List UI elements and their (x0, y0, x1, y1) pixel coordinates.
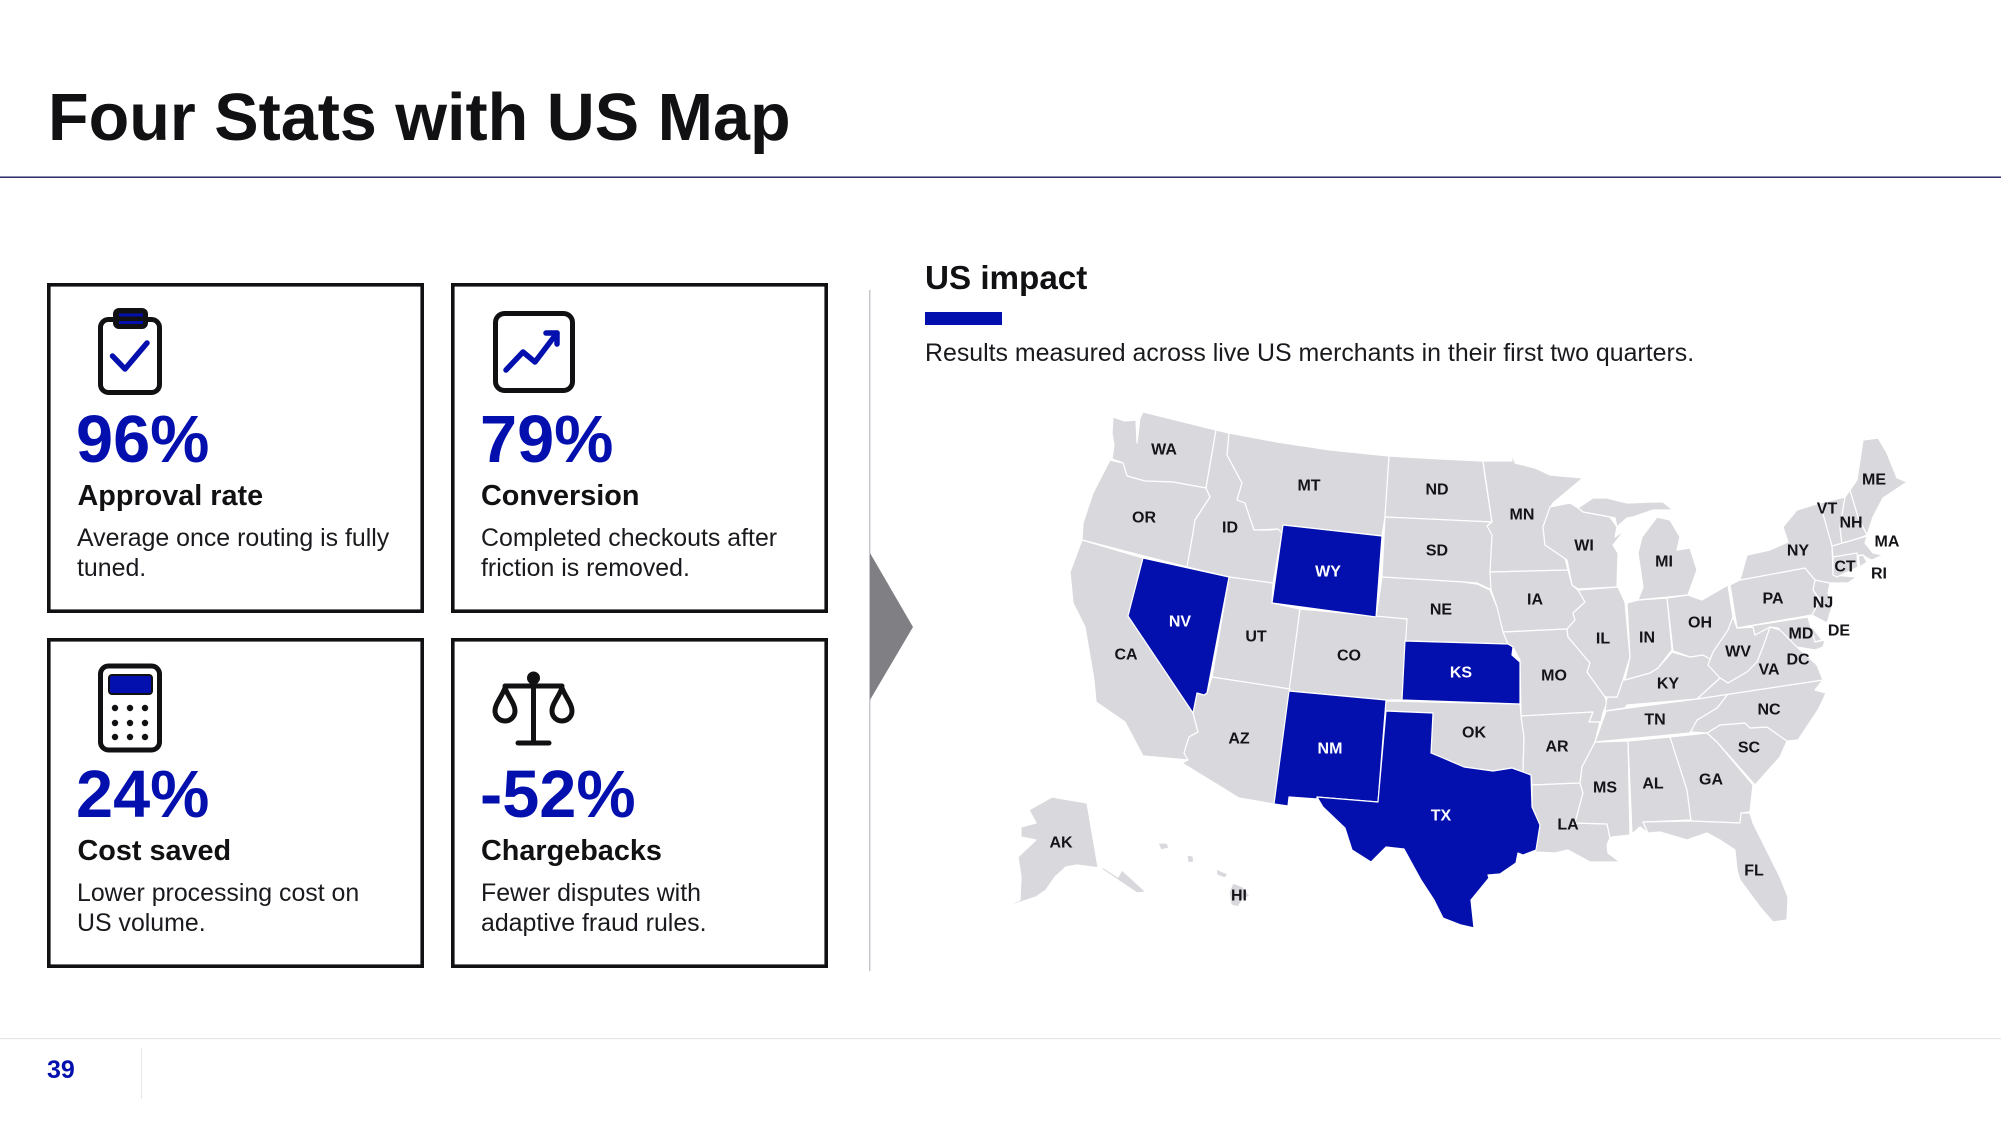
map: state abbreviations: NV (1169, 614, 1191, 630)
map: state abbreviations: WV (1725, 644, 1751, 660)
state: AR (1521, 712, 1600, 785)
state: DE (1808, 617, 1822, 642)
map: state abbreviations: NE (1430, 602, 1452, 618)
state: PA (1730, 568, 1820, 628)
state: TX (highlighted) (1317, 711, 1540, 928)
map: state abbreviations: MD (1789, 626, 1813, 642)
label: cost saved: Cost saved (78, 835, 231, 867)
state: NE (1376, 577, 1508, 644)
icon: scales (495, 672, 572, 743)
map: state abbreviations: HI (1231, 888, 1247, 904)
icon: clipboard check (100, 308, 160, 392)
map: state abbreviations: WI (1574, 538, 1594, 554)
map: state abbreviations: ID (1222, 520, 1238, 536)
map: state abbreviations: AZ (1228, 730, 1250, 748)
accent bar (925, 312, 1002, 325)
map: state abbreviations: NJ (1813, 594, 1833, 612)
icon: trend chart (496, 314, 572, 390)
map: state abbreviations: AK (1049, 834, 1073, 852)
state: LA (1532, 783, 1620, 862)
state: ID (1187, 430, 1282, 583)
state: IN (1625, 598, 1672, 680)
map: state abbreviations: MA (1875, 534, 1900, 550)
state: WY (highlighted) (1272, 525, 1382, 617)
state: RI (1858, 555, 1867, 567)
label: chargebacks: Chargebacks (481, 835, 662, 867)
description: approval rate: Average once routing is fully (77, 524, 390, 552)
state: WI (1543, 503, 1625, 589)
state: MD (1737, 617, 1825, 650)
stat: 96%: 96% (76, 403, 209, 477)
heading: US impact: US impact (925, 260, 1087, 297)
state: CT (1833, 553, 1858, 577)
map: state abbreviations: NY (1787, 542, 1809, 560)
state: KY (1605, 652, 1720, 711)
description: conversion: Completed checkouts after (481, 524, 777, 552)
state: VA (1697, 627, 1823, 699)
panel: approval rate card (49, 285, 422, 611)
description: cost saved: Lower processing cost on (77, 879, 359, 907)
state: SD (1382, 517, 1492, 590)
map: state abbreviations: IN (1639, 630, 1655, 646)
icon: calculator (100, 666, 160, 750)
map: state abbreviations: WA (1151, 442, 1177, 458)
arrow (870, 553, 913, 700)
state: KS (highlighted) (1402, 641, 1520, 704)
map: state abbreviations: CO (1337, 648, 1361, 664)
map: state abbreviations: MN (1510, 506, 1534, 524)
label: conversion: Conversion (481, 480, 639, 512)
state: NV (highlighted) (1128, 558, 1229, 713)
state: MT (1227, 433, 1389, 536)
state: WA (1112, 412, 1216, 488)
map: state abbreviations: DC (1786, 652, 1810, 668)
map: state abbreviations (1049, 442, 1900, 904)
state: AK (1004, 797, 1146, 908)
map: state abbreviations: LA (1557, 816, 1579, 834)
map: state abbreviations: WY (1315, 564, 1341, 580)
title: Four Stats with US Map (48, 81, 791, 155)
state: NH (1840, 490, 1867, 545)
panel: conversion card (453, 285, 826, 611)
description: conversion: friction is removed. (481, 554, 690, 582)
map: state abbreviations: DE (1828, 622, 1850, 640)
state: OK (1385, 701, 1524, 772)
state: AL (1628, 737, 1691, 834)
map: state abbreviations: ND (1425, 482, 1449, 498)
state: NJ (1812, 580, 1832, 623)
page number: 39 (47, 1056, 75, 1084)
map: state abbreviations: SD (1426, 542, 1448, 560)
map: state abbreviations: VA (1758, 662, 1780, 678)
panel: cost saved card (49, 640, 422, 966)
state: GA (1670, 733, 1753, 823)
label: approval rate: Approval rate (78, 480, 263, 512)
text: map description: Results measured across live US merchants in their first two quarters. (925, 339, 1694, 367)
stat: -52%: -52% (480, 758, 636, 832)
state: WV (1708, 617, 1778, 683)
description: cost saved: US volume. (77, 909, 206, 937)
map: state abbreviations: IL (1596, 630, 1610, 648)
footer divider (141, 1048, 142, 1099)
map: state abbreviations: PA (1762, 590, 1784, 608)
map: state abbreviations: TN (1644, 712, 1666, 728)
state: MI (1578, 498, 1697, 600)
stat: 79%: 79% (480, 403, 613, 477)
map: state abbreviations: MO (1541, 668, 1567, 684)
map: state abbreviations: OH (1688, 614, 1712, 632)
state: IL (1567, 587, 1630, 697)
state: SC (1707, 723, 1787, 785)
state: AZ (1182, 677, 1290, 804)
state: CO (1289, 609, 1407, 700)
map: state abbreviations: SC (1738, 740, 1761, 756)
map: state abbreviations: CA (1114, 646, 1138, 664)
state: ND (1385, 456, 1492, 522)
state: CA (1070, 540, 1198, 760)
map: state abbreviations: ME (1862, 472, 1886, 488)
map: state abbreviations: MS (1593, 780, 1617, 796)
map: state abbreviations: KS (1450, 664, 1472, 682)
state: ME (1850, 438, 1907, 535)
state: FL (1643, 813, 1788, 922)
map: state abbreviations: TX (1431, 808, 1452, 824)
state: MN (1483, 453, 1583, 572)
state: MS (1575, 741, 1630, 838)
state: TN (1595, 694, 1728, 742)
state: VT (1820, 497, 1845, 546)
description: chargebacks: Fewer disputes with (481, 879, 701, 907)
stat: 24%: 24% (76, 758, 209, 832)
map: state abbreviations: CT (1834, 558, 1856, 576)
state: MA (1832, 536, 1883, 560)
panel: chargebacks card (453, 640, 826, 966)
header rule (0, 176, 2001, 178)
state: NM (highlighted) (1274, 691, 1386, 806)
description: approval rate: tuned. (77, 554, 146, 582)
map: state abbreviations: AR (1545, 738, 1569, 756)
state: MO (1503, 629, 1607, 722)
map: state abbreviations: KY (1657, 676, 1679, 692)
footer rule (0, 1038, 2001, 1039)
state: OH (1667, 585, 1733, 660)
vertical divider (869, 290, 870, 971)
map: state abbreviations: MI (1655, 554, 1673, 570)
map: state abbreviations: AL (1642, 776, 1664, 792)
state: UT (1212, 577, 1300, 689)
map: US states (1004, 412, 1907, 928)
state: NC (1690, 680, 1826, 741)
state: NY (1740, 503, 1857, 583)
map: state abbreviations: NC (1757, 702, 1781, 718)
map: state abbreviations: MT (1297, 478, 1321, 494)
map: state abbreviations: OK (1462, 724, 1486, 742)
map: state abbreviations: VT (1817, 500, 1837, 518)
map: state abbreviations: OR (1132, 510, 1156, 526)
state: IA (1490, 570, 1585, 632)
map: state abbreviations: UT (1245, 628, 1267, 646)
description: chargebacks: adaptive fraud rules. (481, 909, 707, 937)
state: HI (1158, 843, 1250, 907)
map: state abbreviations: NH (1839, 514, 1863, 532)
map: state abbreviations: FL (1744, 862, 1764, 880)
map: state abbreviations: RI (1871, 566, 1887, 582)
map: state abbreviations: IA (1527, 592, 1543, 608)
map: state abbreviations: NM (1318, 740, 1342, 758)
state: OR (1082, 460, 1210, 567)
map: state abbreviations: GA (1699, 772, 1723, 788)
